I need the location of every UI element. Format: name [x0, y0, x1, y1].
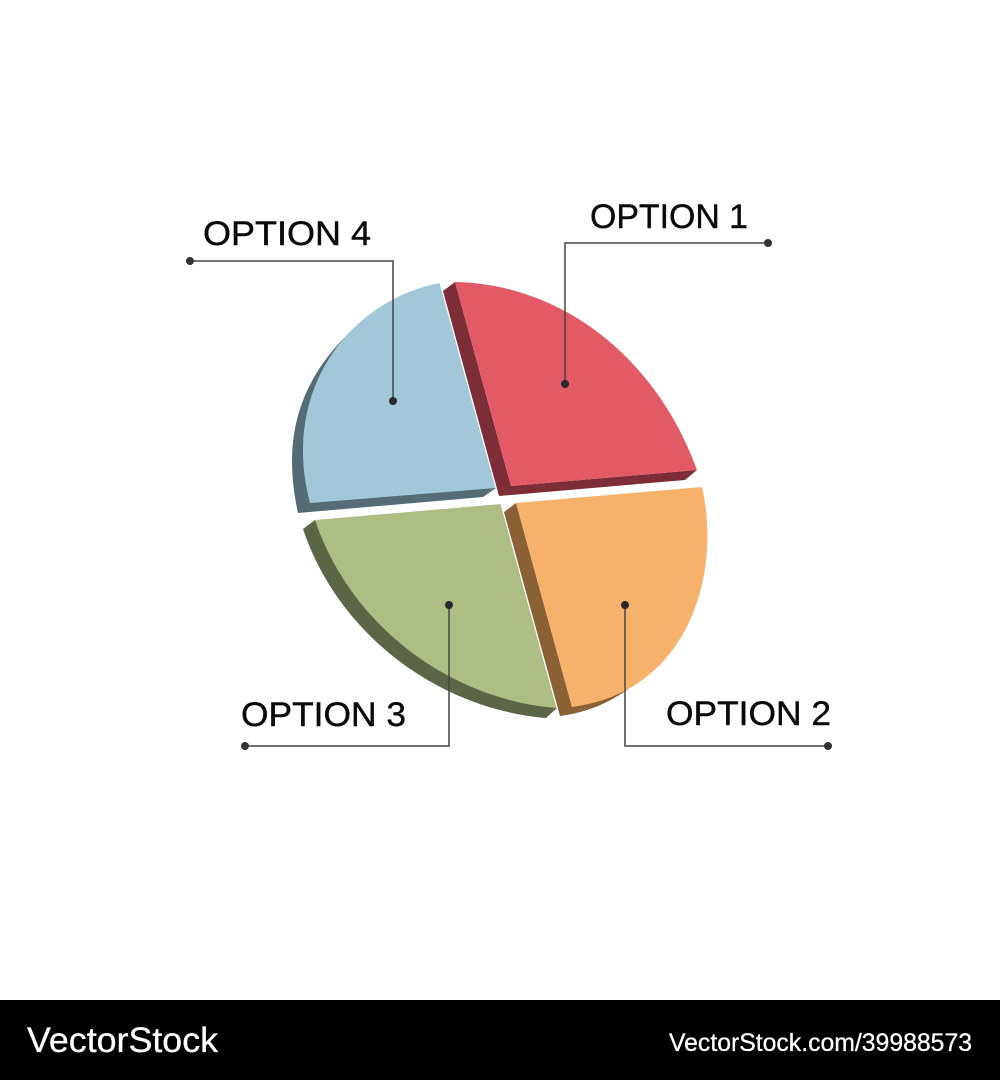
slice: option 4 (blue): [292, 283, 496, 513]
callout: option 1: [561, 198, 772, 388]
slice: option 1 (red): [443, 282, 697, 496]
footer brand: VectorStock: [27, 1021, 219, 1060]
slice: option 2 (orange): [504, 487, 707, 716]
callout: option 3: OPTION 3: [241, 696, 406, 734]
callout: option 3: [241, 601, 453, 750]
footer bar: [0, 1000, 1000, 1080]
3D pie chart: [292, 282, 707, 718]
callout: option 1: OPTION 1: [590, 198, 748, 236]
footer url: VectorStock.com/39988573: [669, 1029, 972, 1057]
callout: option 4: OPTION 4: [203, 215, 371, 253]
callout: option 2: OPTION 2: [666, 695, 831, 733]
callout: option 2: [621, 601, 832, 750]
slice: option 3 (green): [303, 504, 557, 718]
callout: option 4: [186, 215, 397, 405]
